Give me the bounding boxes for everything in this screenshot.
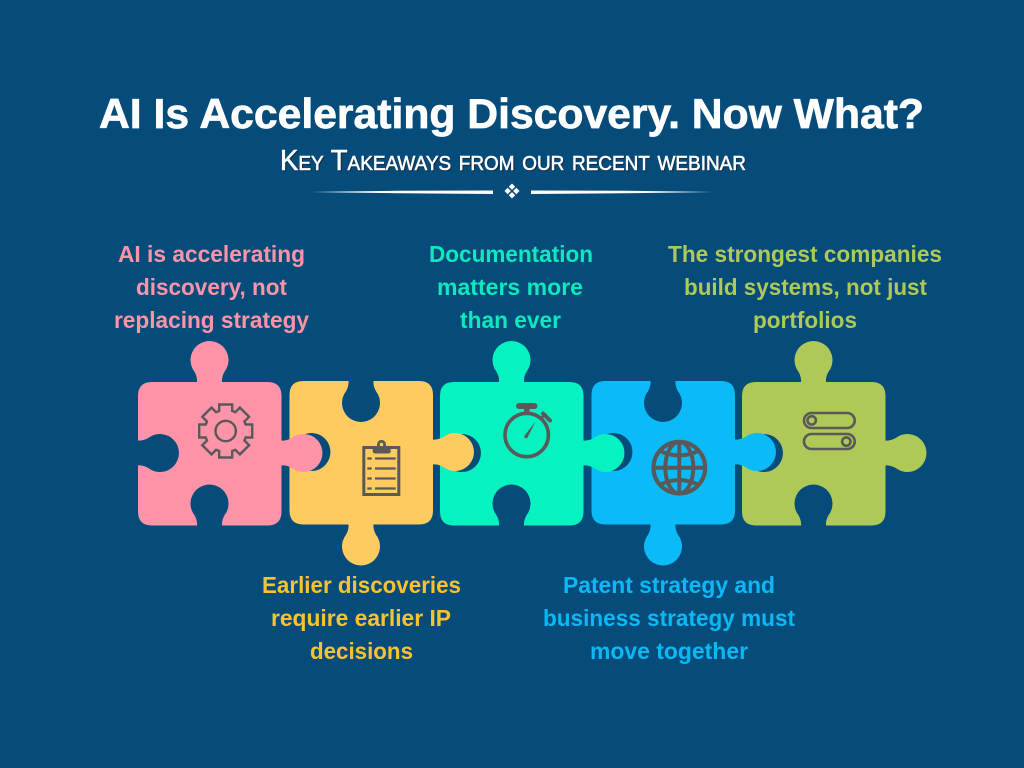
title divider with ornament (311, 184, 713, 198)
puzzle piece: pink (138, 341, 322, 526)
puzzle piece: teal (440, 341, 624, 526)
icon: globe (654, 442, 705, 494)
label: blue takeaway: move together (590, 638, 748, 664)
label: blue takeaway: Patent strategy and (563, 572, 775, 598)
label: pink takeaway: replacing strategy (114, 307, 309, 333)
puzzle piece: yellow (290, 381, 474, 565)
subtitle: Key Takeaways from our recent webinar (280, 145, 746, 177)
label: yellow takeaway: decisions (310, 638, 413, 664)
label: yellow takeaway (262, 572, 461, 664)
label: teal takeaway: matters more (437, 274, 583, 300)
label: pink takeaway: discovery, not (136, 274, 287, 300)
title: AI Is Accelerating Discovery. Now What? (99, 90, 924, 137)
icon: clipboard checklist (364, 440, 399, 494)
label: teal takeaway: Documentation (429, 241, 593, 267)
label: yellow takeaway: Earlier discoveries (262, 572, 461, 598)
icon: toggle switches (804, 413, 855, 449)
label: teal takeaway: than ever (460, 307, 561, 333)
puzzle piece: blue (592, 381, 776, 565)
label: pink takeaway (114, 241, 309, 333)
label: pink takeaway: AI is accelerating (118, 241, 305, 267)
label: blue takeaway: business strategy must (543, 605, 795, 631)
label: lime takeaway (668, 241, 942, 333)
label: lime takeaway: The strongest companies (668, 241, 942, 267)
label: lime takeaway: portfolios (753, 307, 857, 333)
icon: stopwatch (505, 403, 550, 457)
puzzle piece: lime (742, 341, 926, 526)
label: lime takeaway: build systems, not just (684, 274, 927, 300)
label: yellow takeaway: require earlier IP (271, 605, 451, 631)
label: blue takeaway (543, 572, 795, 664)
icon: gear (199, 404, 252, 458)
label: teal takeaway (429, 241, 593, 333)
